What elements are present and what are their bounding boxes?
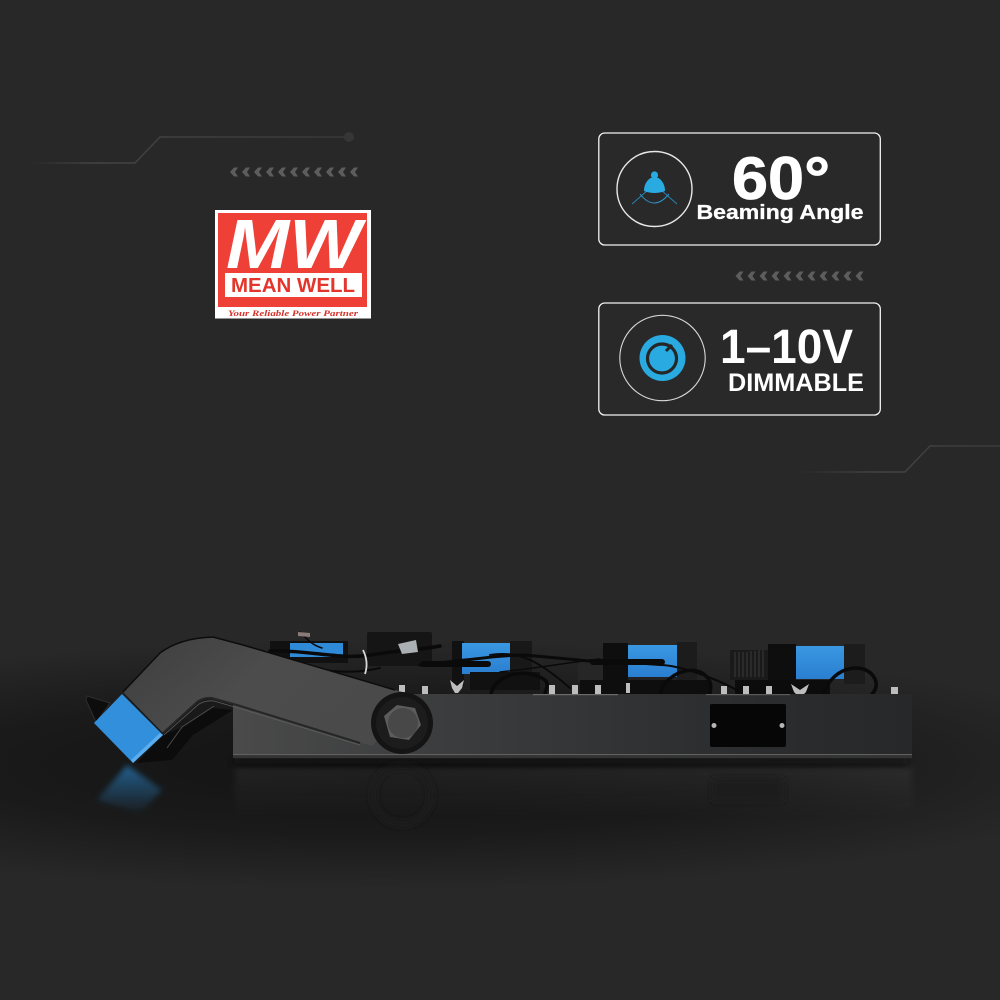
decorative circuit line: right (796, 446, 1000, 472)
label: Beaming Angle: Beaming Angle (696, 201, 864, 224)
connector 1 (423, 661, 488, 667)
Mean Well logo: MEAN WELL (231, 275, 355, 297)
nameplate (710, 704, 786, 747)
panel: dimmable (599, 303, 880, 415)
bolts and wing nuts (399, 680, 898, 696)
decorative circuit line: top left (28, 132, 354, 163)
lamp modules (270, 632, 865, 695)
pivot hub (371, 692, 433, 754)
product: floodlight side view (86, 632, 912, 764)
housing bar (233, 694, 912, 758)
rear hook (86, 696, 110, 722)
blue end cap (94, 694, 163, 763)
chevron row: between panels (736, 272, 864, 280)
module 3 (730, 650, 768, 680)
connector 2 (593, 659, 662, 665)
module 1 (452, 641, 464, 686)
cable label and tie (363, 650, 367, 674)
shadow under product (235, 757, 907, 764)
label: DIMMABLE: DIMMABLE (728, 369, 864, 397)
lower bracket foot (137, 708, 233, 763)
chevron row: top left (230, 168, 358, 176)
icon: beam lamp (617, 152, 692, 226)
value: 60 degrees: 60° (732, 145, 830, 212)
tilting arm (123, 637, 418, 746)
Mean Well logo: Your Reliable Power Partner (228, 308, 359, 318)
dark box (367, 632, 432, 666)
panel: beaming angle (599, 133, 880, 245)
floor reflection (97, 765, 912, 824)
rear module behind arm (270, 641, 348, 663)
module 2 (578, 652, 603, 682)
Mean Well logo: MW (226, 205, 367, 283)
cables (270, 632, 876, 694)
icon: dimmer knob (620, 315, 705, 401)
Mean Well logo (215, 205, 371, 318)
value: 1-10V: 1–10V (720, 321, 853, 374)
